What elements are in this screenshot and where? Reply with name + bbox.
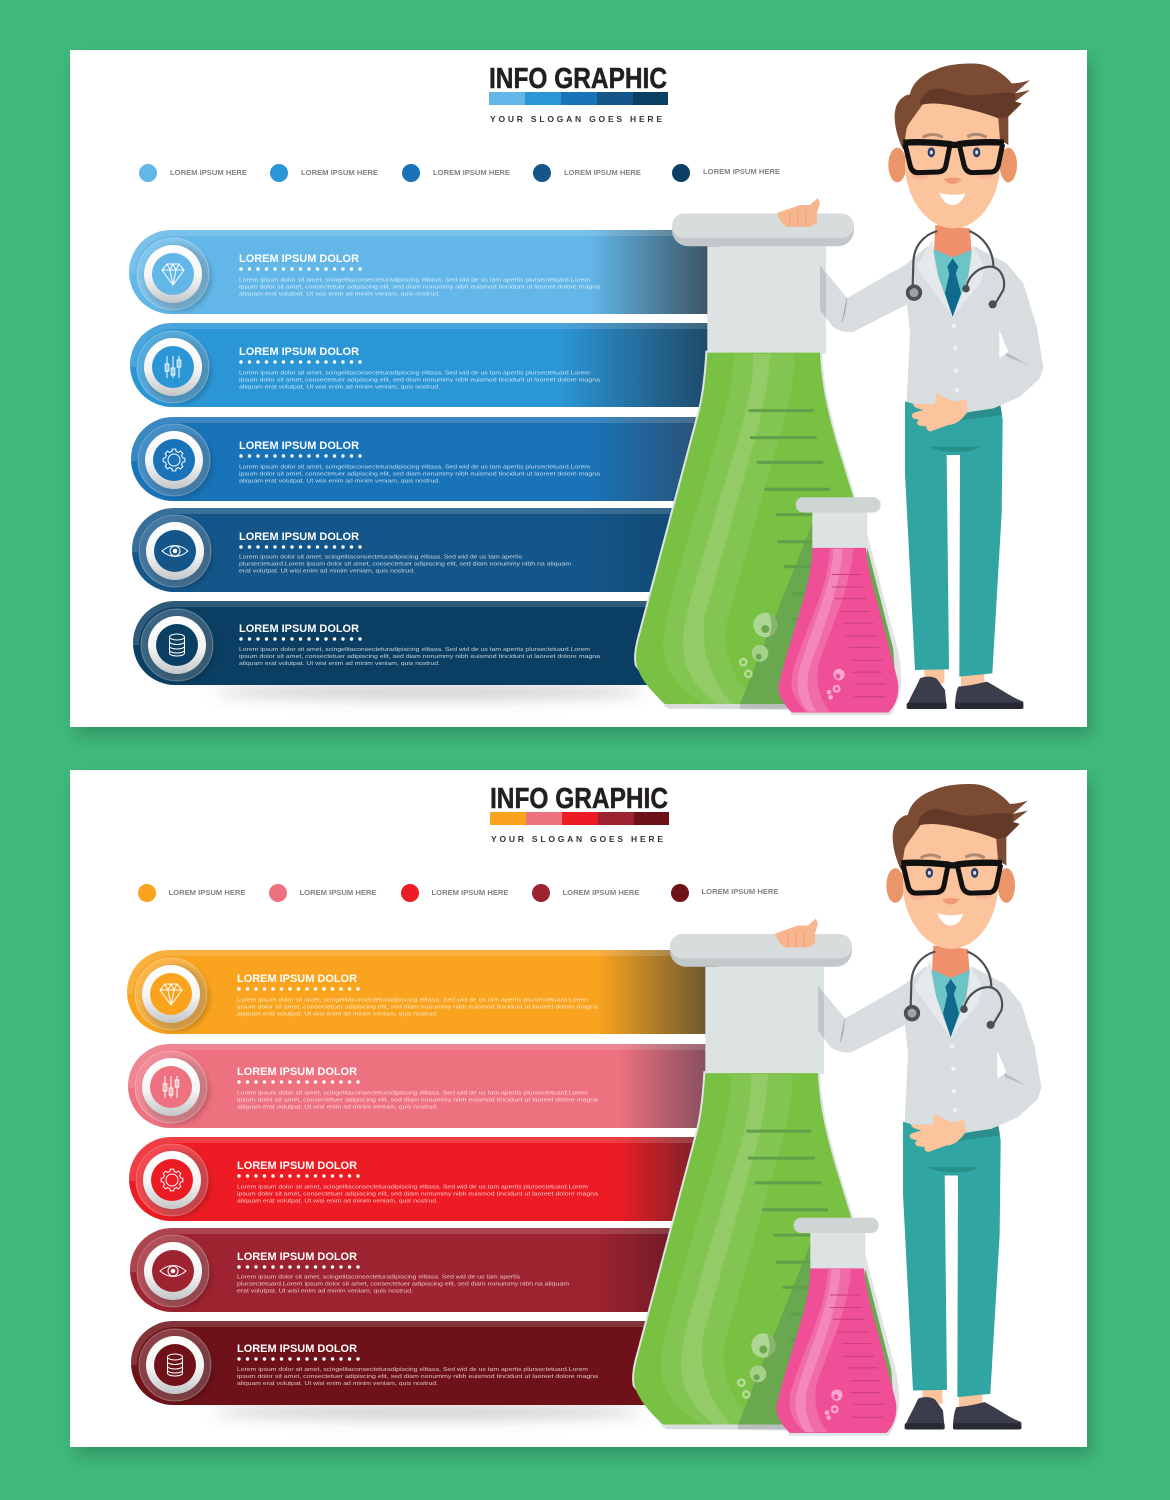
- bar 1: ipsum dolor sit amet, consectetuer adipiscing elit, sed diam nonummy nibh euismod tincidunt ut laoreet dolore magna: [239, 284, 601, 290]
- bar 1: Lorem ipsum dolor sit amet, scingelitaconsecteturadipiscing elitasa. Sed wid de us tam apertis plursectetuard.Lorem: [239, 278, 590, 284]
- big flask: [636, 214, 897, 710]
- illustration: flasks: [636, 214, 901, 715]
- stethoscope: [908, 231, 1004, 307]
- bar 5: aliquam erat volutpat. Ut wisi enim ad minim veniam, quis nostrud.: [239, 661, 440, 667]
- bar 2: ipsum dolor sit amet, consectetuer adipiscing elit, sed diam nonummy nibh euismod tincidunt ut laoreet dolore magna: [237, 1098, 599, 1104]
- bar 5: LOREM IPSUM DOLOR: [237, 1343, 357, 1355]
- bar 3: LOREM IPSUM DOLOR: [239, 440, 359, 452]
- bar 5: [133, 601, 720, 685]
- bar 3: aliquam erat volutpat. Ut wisi enim ad minim veniam, quis nostrud.: [239, 478, 440, 484]
- bar 3: LOREM IPSUM DOLOR: [237, 1160, 357, 1172]
- illustration: doctor: [820, 64, 1043, 709]
- legend: LOREM IPSUM HERE: [562, 890, 640, 897]
- bar 2: [128, 1044, 718, 1128]
- bar 3: [129, 1137, 718, 1221]
- legend: LOREM IPSUM HERE: [433, 170, 510, 177]
- bar 4: [130, 1228, 718, 1312]
- bar 5: [131, 1321, 718, 1405]
- legs and shoes: [905, 402, 1023, 709]
- bar 4: erat volutpat. Ut wisi enim ad minim veniam, quis nostrud.: [237, 1288, 413, 1294]
- bar 3: [131, 417, 720, 501]
- title block: [489, 63, 668, 124]
- bar 2: LOREM IPSUM DOLOR: [237, 1066, 357, 1078]
- glasses: [903, 142, 1004, 173]
- bar 5: ipsum dolor sit amet, consectetuer adipiscing elit, sed diam nonummy nibh euismod tincidunt ut laoreet dolore magna: [239, 654, 601, 660]
- panel: orange and red infographic: [70, 770, 1092, 1456]
- legend: LOREM IPSUM HERE: [170, 170, 247, 177]
- bar 2: [130, 323, 720, 407]
- bar 3: ipsum dolor sit amet, consectetuer adipiscing elit, sed diam nonummy nibh euismod tincidunt ut laoreet dolore magna: [237, 1192, 599, 1198]
- panel: blue infographic: [70, 50, 1092, 736]
- bar 2: LOREM IPSUM DOLOR: [239, 346, 359, 358]
- bar 2: Lorem ipsum dolor sit amet, scingelitaconsecteturadipiscing elitasa. Sed wid de us tam apertis plursectetuard.Lorem: [239, 370, 590, 376]
- bar 3: aliquam erat volutpat. Ut wisi enim ad minim veniam, quis nostrud.: [237, 1198, 438, 1204]
- legend: LOREM IPSUM HERE: [300, 890, 377, 897]
- legend: LOREM IPSUM HERE: [564, 170, 641, 177]
- legend: [138, 884, 779, 902]
- bar 3: Lorem ipsum dolor sit amet, scingelitaconsecteturadipiscing elitasa. Sed wid de us tam apertis plursectetuard.Lorem: [239, 464, 590, 470]
- legend: LOREM IPSUM HERE: [703, 169, 780, 176]
- bar 2: ipsum dolor sit amet, consectetuer adipiscing elit, sed diam nonummy nibh euismod tincidunt ut laoreet dolore magna: [239, 378, 601, 384]
- legend: [139, 164, 780, 182]
- bar 5: LOREM IPSUM DOLOR: [239, 623, 359, 635]
- title block: INFO GRAPHIC: [490, 783, 668, 815]
- bar 1: aliquam erat volutpat. Ut wisi enim ad minim veniam, quis nostrud.: [239, 292, 440, 298]
- bar 5: ipsum dolor sit amet, consectetuer adipiscing elit, sed diam nonummy nibh euismod tincidunt ut laoreet dolore magna: [237, 1374, 599, 1380]
- bar 1: [129, 230, 720, 314]
- small flask: [778, 497, 901, 715]
- hand on flask cap: [777, 198, 820, 227]
- bar 2: Lorem ipsum dolor sit amet, scingelitaconsecteturadipiscing elitasa. Sed wid de us tam apertis plursectetuard.Lorem: [237, 1090, 588, 1096]
- legend: LOREM IPSUM HERE: [432, 890, 509, 897]
- coat and arm: [820, 240, 1043, 413]
- title block: [490, 783, 669, 844]
- illustration: flasks: [634, 934, 899, 1436]
- bar 4: plursectetuard.Lorem ipsum dolor sit amet, consectetuer adipiscing elit, sed diam nonummy nibh na aliquam: [237, 1282, 569, 1288]
- bar 4: LOREM IPSUM DOLOR: [237, 1251, 357, 1263]
- bar 4: [132, 508, 720, 592]
- title block: YOUR SLOGAN GOES HERE: [491, 834, 663, 844]
- bar 5: Lorem ipsum dolor sit amet, scingelitaconsecteturadipiscing elitasa. Sed wid de us tam apertis plursectetuard.Lorem: [237, 1367, 588, 1373]
- title block: INFO GRAPHIC: [489, 63, 667, 95]
- bar 5: Lorem ipsum dolor sit amet, scingelitaconsecteturadipiscing elitasa. Sed wid de us tam apertis plursectetuard.Lorem: [239, 647, 590, 653]
- hand on flask cap: [775, 918, 818, 948]
- legend: LOREM IPSUM HERE: [702, 889, 779, 896]
- shirt and tie: [933, 225, 972, 317]
- bar 3: ipsum dolor sit amet, consectetuer adipiscing elit, sed diam nonummy nibh euismod tincidunt ut laoreet dolore magna: [239, 472, 601, 478]
- illustration: doctor: [818, 784, 1041, 1429]
- legend: LOREM IPSUM HERE: [168, 890, 246, 897]
- bar 1: aliquam erat volutpat. Ut wisi enim ad minim veniam, quis nostrud.: [237, 1012, 438, 1018]
- bar 4: erat volutpat. Ut wisi enim ad minim veniam, quis nostrud.: [239, 568, 415, 574]
- bar 4: Lorem ipsum dolor sit amet, scingelitaconsecteturadipiscing elitasa. Sed wid de us tam apertis: [237, 1274, 520, 1280]
- hand on belly: [912, 393, 968, 432]
- title block: YOUR SLOGAN GOES HERE: [490, 114, 662, 124]
- bar 5: aliquam erat volutpat. Ut wisi enim ad minim veniam, quis nostrud.: [237, 1381, 438, 1387]
- bar 3: Lorem ipsum dolor sit amet, scingelitaconsecteturadipiscing elitasa. Sed wid de us tam apertis plursectetuard.Lorem: [237, 1184, 588, 1190]
- bar 1: LOREM IPSUM DOLOR: [239, 253, 359, 265]
- head: [888, 64, 1030, 228]
- bar 1: Lorem ipsum dolor sit amet, scingelitaconsecteturadipiscing elitasa. Sed wid de us tam apertis plursectetuard.Lorem: [237, 998, 588, 1004]
- bar 4: Lorem ipsum dolor sit amet, scingelitaconsecteturadipiscing elitasa. Sed wid de us tam apertis: [239, 554, 522, 560]
- bar 1: [127, 950, 718, 1034]
- bar 2: aliquam erat volutpat. Ut wisi enim ad minim veniam, quis nostrud.: [237, 1104, 438, 1110]
- bar 2: aliquam erat volutpat. Ut wisi enim ad minim veniam, quis nostrud.: [239, 384, 440, 390]
- bar 4: LOREM IPSUM DOLOR: [239, 531, 359, 543]
- bar 4: plursectetuard.Lorem ipsum dolor sit amet, consectetuer adipiscing elit, sed diam nonummy nibh na aliquam: [239, 562, 571, 568]
- bar 1: LOREM IPSUM DOLOR: [237, 973, 357, 985]
- legend: LOREM IPSUM HERE: [301, 170, 378, 177]
- bar 1: ipsum dolor sit amet, consectetuer adipiscing elit, sed diam nonummy nibh euismod tincidunt ut laoreet dolore magna: [237, 1004, 599, 1010]
